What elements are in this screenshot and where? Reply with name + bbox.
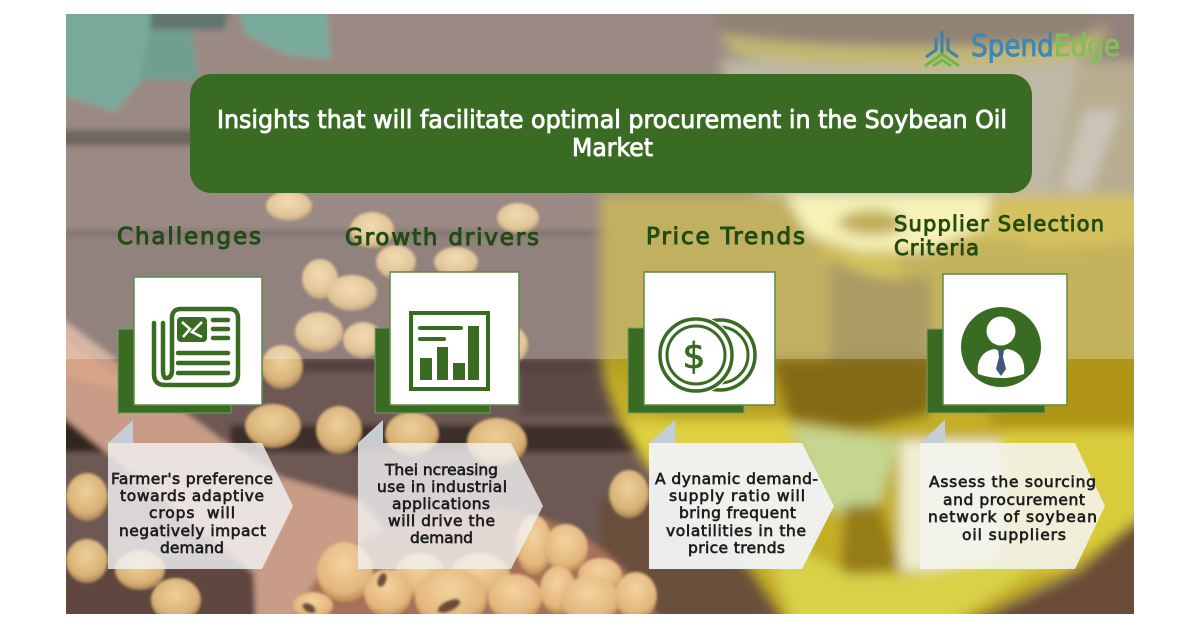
logo: SpendEdge	[925, 29, 1120, 66]
heading: Supplier Selection Criteria	[894, 212, 1104, 260]
callout: Price Trends: bring frequent	[679, 504, 796, 522]
column: Supplier Selection Criteria	[894, 212, 1105, 569]
callout: Price Trends: price trends	[688, 539, 785, 557]
callout: Growth drivers: demand	[410, 529, 473, 547]
callout: Growth drivers: applications	[392, 495, 490, 513]
oil jar lower	[600, 195, 1170, 627]
column: Growth drivers	[345, 225, 543, 569]
icon card: bar chart	[375, 272, 519, 413]
heading: Challenges: Challenges	[117, 224, 261, 250]
icon card: coins	[628, 272, 775, 413]
callout: Growth drivers: will drive the	[388, 512, 495, 530]
bean hilum marks	[301, 572, 462, 616]
wooden spoon	[66, 318, 383, 614]
callout: Price Trends: supply ratio will	[669, 487, 805, 505]
callout: Supplier Selection Criteria	[920, 420, 1105, 569]
title text	[217, 105, 1007, 162]
light upper band	[66, 14, 1134, 359]
callout: Challenges: Farmer's preference	[111, 470, 273, 488]
callout: Price Trends: volatilities in the	[666, 522, 806, 540]
icon card: coins: $	[683, 336, 705, 377]
heading: Supplier Selection Criteria: Criteria	[894, 236, 979, 260]
heading: Price Trends: Price Trends	[646, 224, 805, 250]
callout: Challenges: crops will	[149, 504, 235, 522]
bowl	[294, 511, 660, 614]
heading: Supplier Selection Criteria: Supplier Selection	[894, 212, 1104, 236]
callout: Challenges: towards adaptive	[120, 487, 264, 505]
callout: Growth drivers	[358, 420, 543, 569]
callout: Supplier Selection Criteria: and procurement	[943, 491, 1085, 509]
callout: Growth drivers: use in industrial	[377, 478, 507, 496]
title text: Insights that will facilitate optimal procurement in the Soybean Oil	[217, 105, 1007, 134]
column: Price Trends	[628, 224, 834, 569]
callout: Price Trends: A dynamic demand-	[655, 470, 818, 488]
callout: Growth drivers: Thei ncreasing	[384, 461, 498, 479]
logo wordmark: SpendEdge	[971, 29, 1120, 64]
logo icon	[925, 31, 959, 66]
callout: Supplier Selection Criteria: network of soybean	[928, 508, 1097, 526]
callout: Challenges: negatively impact	[119, 522, 266, 540]
jar neck and lid	[580, 0, 760, 195]
icon card: person	[927, 274, 1067, 413]
heading: Growth drivers: Growth drivers	[345, 225, 539, 251]
callout: Challenges: demand	[160, 539, 224, 557]
soybeans	[66, 191, 649, 622]
callout: Supplier Selection Criteria: Assess the sourcing	[929, 473, 1096, 491]
callout: Supplier Selection Criteria: oil suppliers	[962, 526, 1066, 544]
title banner	[190, 74, 1032, 193]
title text: Market	[572, 133, 653, 162]
column: Challenges	[108, 224, 293, 569]
icon card: newspaper	[118, 277, 262, 413]
jar upper	[599, 193, 832, 364]
soybeans in bowl	[292, 514, 658, 614]
callout: Price Trends	[649, 420, 834, 569]
leaves	[66, 14, 154, 113]
callout: Challenges	[108, 420, 293, 569]
